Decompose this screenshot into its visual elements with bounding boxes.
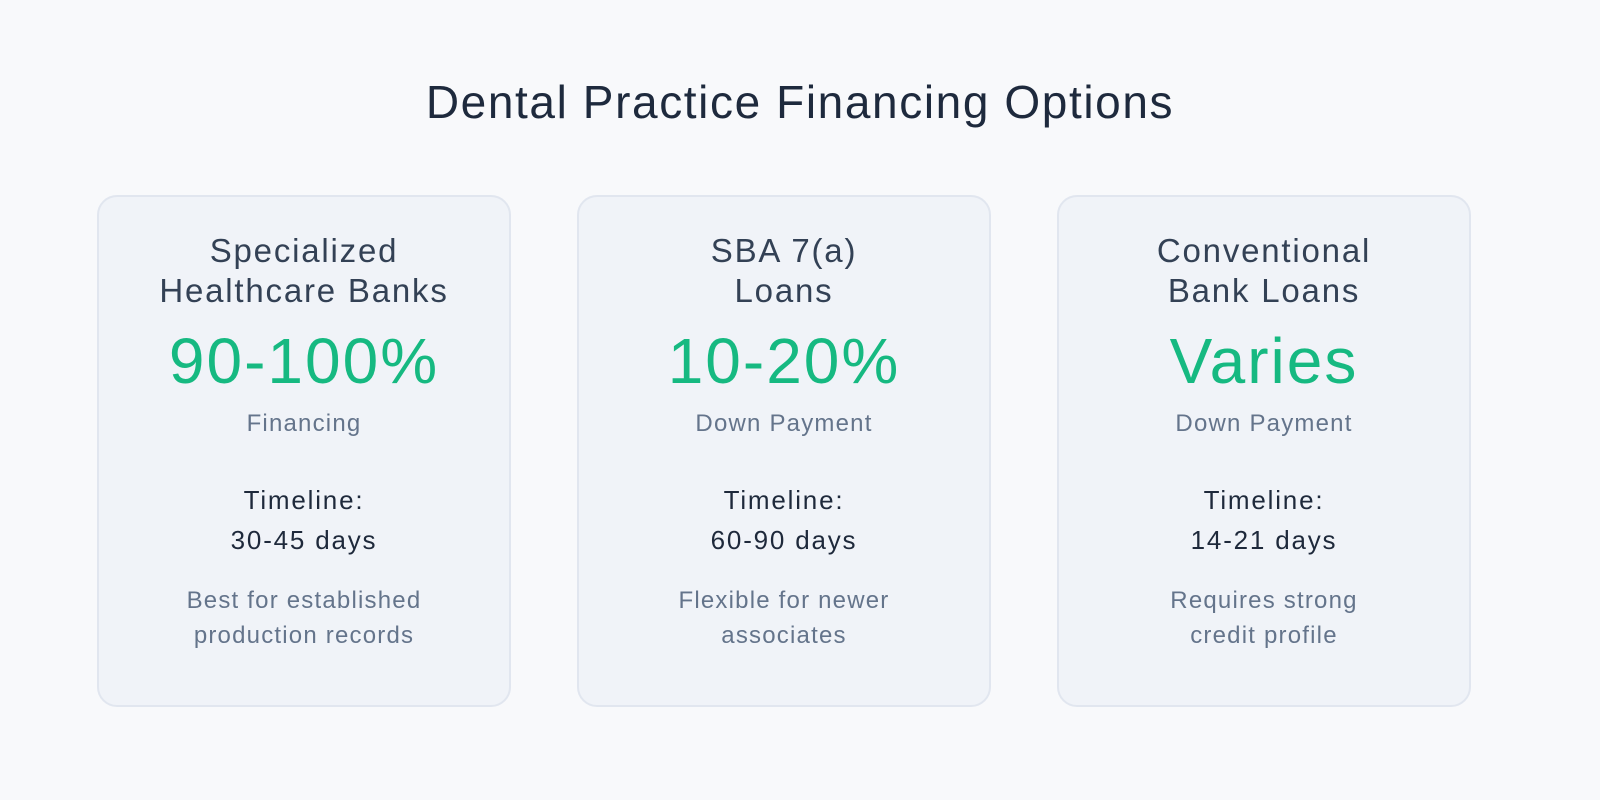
panel: conventional bank loans <box>1057 195 1471 707</box>
panel: SBA loans <box>577 195 991 707</box>
timeline: 30-45 days <box>231 525 377 555</box>
description: Requires strong <box>1170 587 1358 614</box>
description <box>187 587 421 649</box>
label: Financing <box>247 410 361 437</box>
description: production records <box>194 622 414 649</box>
heading: Conventional <box>1157 232 1371 269</box>
heading <box>159 232 449 309</box>
timeline <box>231 485 377 555</box>
heading: SBA 7(a) <box>711 232 857 269</box>
label: Down Payment <box>1175 410 1353 437</box>
timeline <box>711 485 857 555</box>
big figure: 10-20% <box>668 325 900 397</box>
description: associates <box>721 622 847 649</box>
description <box>678 587 890 649</box>
timeline: 60-90 days <box>711 525 857 555</box>
heading: Specialized <box>210 232 398 269</box>
big figure: Varies <box>1170 325 1358 397</box>
description: Flexible for newer <box>678 587 890 614</box>
description: credit profile <box>1190 622 1338 649</box>
timeline: 14-21 days <box>1191 525 1337 555</box>
heading: Healthcare Banks <box>159 272 449 309</box>
heading: Bank Loans <box>1168 272 1360 309</box>
heading <box>1157 232 1371 309</box>
big figure: 90-100% <box>169 325 439 397</box>
timeline: Timeline: <box>1204 485 1324 515</box>
heading: Loans <box>735 272 833 309</box>
timeline <box>1191 485 1337 555</box>
description: Best for established <box>187 587 421 614</box>
description <box>1170 587 1358 649</box>
label: Down Payment <box>695 410 873 437</box>
heading <box>711 232 857 309</box>
timeline: Timeline: <box>724 485 844 515</box>
title: Dental Practice Financing Options <box>426 76 1174 128</box>
timeline: Timeline: <box>244 485 364 515</box>
panel: specialized healthcare banks <box>97 195 511 707</box>
